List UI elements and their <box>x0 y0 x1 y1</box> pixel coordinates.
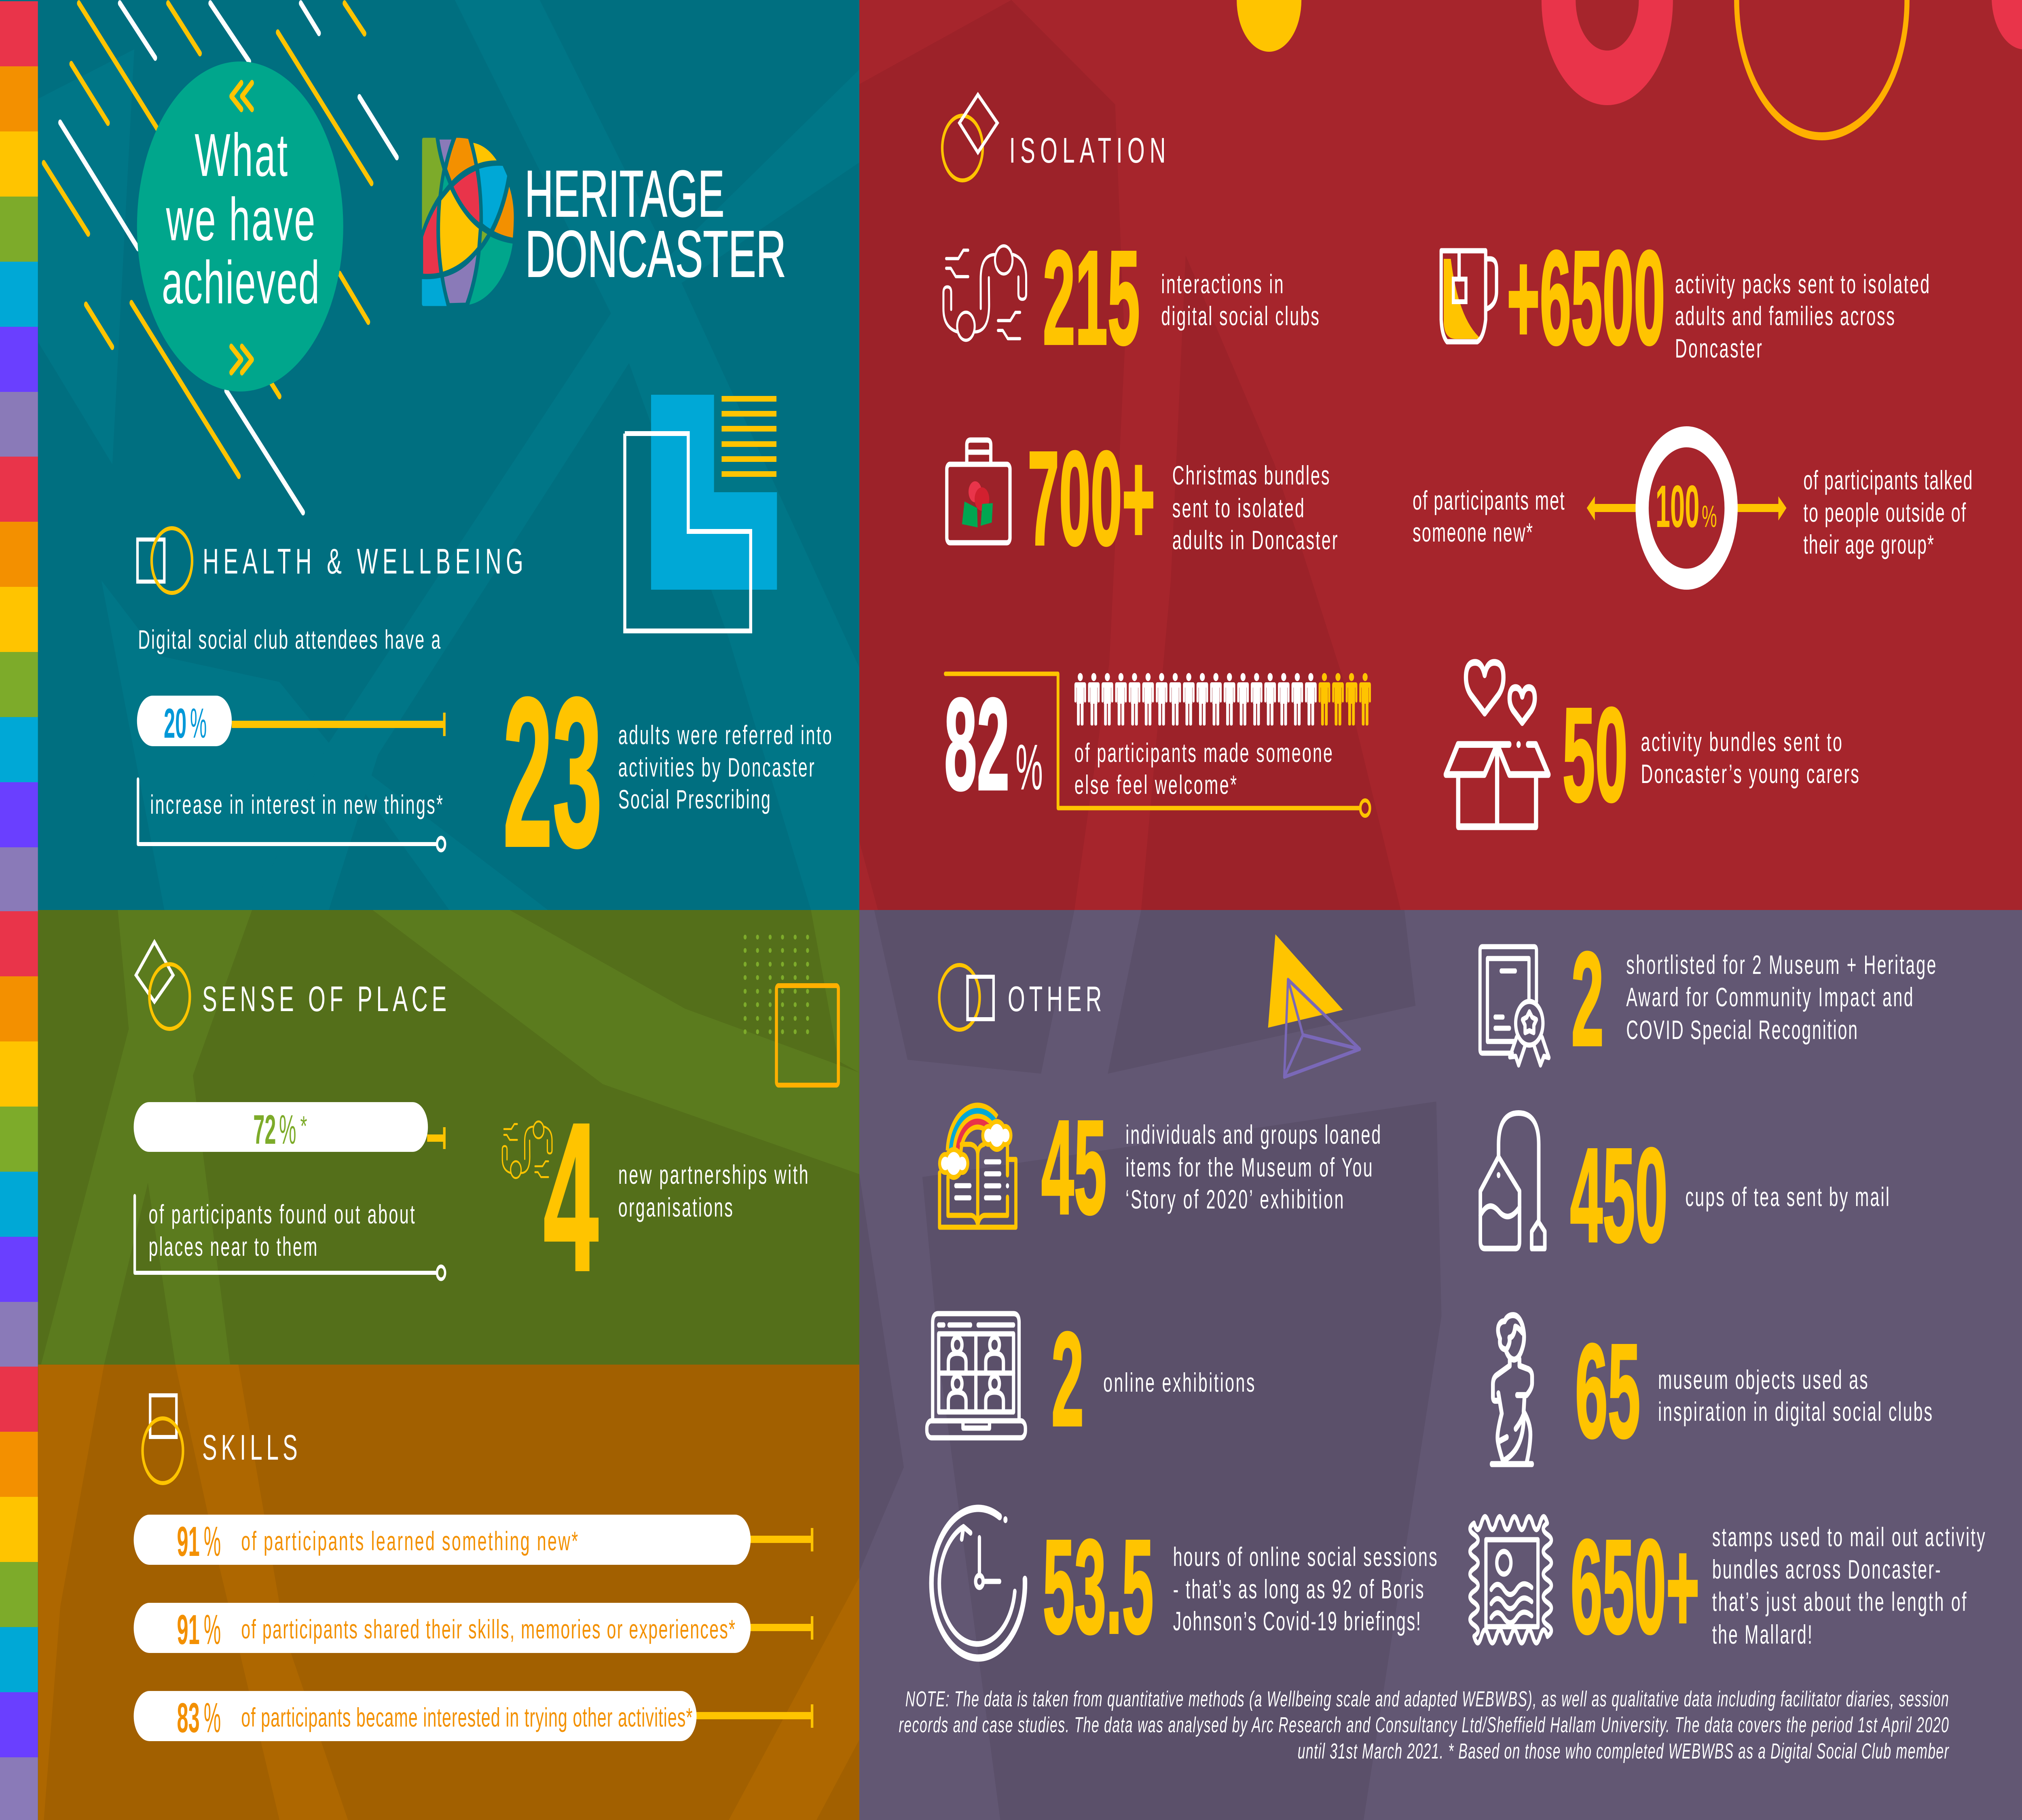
icon: stamp <box>1470 1517 1551 1643</box>
stat: 50 activity bundles: 50 <box>1563 681 1628 830</box>
stat: 4 partnerships: organisations <box>618 1192 733 1222</box>
stat: 45 loaned items <box>938 1093 1381 1242</box>
logo: Heritage Doncaster <box>422 138 786 306</box>
stat: 100 percent with arrows <box>1413 437 1973 579</box>
stat: 450 cups of tea: cups of tea sent by mail <box>1686 1182 1889 1212</box>
stat: 215 interactions: 215 <box>1043 224 1140 372</box>
title: we have <box>166 185 315 253</box>
stat: 6500 activity packs: adults and families across <box>1675 301 1895 331</box>
stat: 700 Christmas bundles <box>947 424 1338 573</box>
note text: until 31st March 2021. * Based on those who completed WEBWBS as a Digital Social Club member <box>1298 1739 1949 1763</box>
stat: 53.5 hours: hours of online social sessions <box>1173 1542 1437 1572</box>
stat: 700 Christmas bundles: Christmas bundles <box>1172 460 1330 490</box>
stat: 2 awards shortlisted: Award for Community Impact and <box>1626 982 1913 1012</box>
icon: clock <box>931 1508 1025 1658</box>
stat: 53.5 hours: - that’s as long as 92 of Boris <box>1173 1574 1424 1604</box>
icon: link people <box>943 246 1026 340</box>
stat: 82 percent with people <box>944 671 1371 818</box>
icon: opening chevrons <box>231 83 252 109</box>
stat: 20 percent bar: increase in interest in new things* <box>150 789 443 819</box>
note text: records and case studies. The data was analysed by Arc Research and Consultancy Ltd/Sheffield Hallam University. The data covers the period 1st April 2020 <box>899 1712 1949 1737</box>
arrow: right <box>1737 496 1787 521</box>
stat: 82 percent with people: else feel welcome* <box>1074 770 1237 800</box>
stat: skills bars: of participants learned something new* <box>241 1526 578 1556</box>
stat: 700 Christmas bundles: 700+ <box>1028 424 1155 573</box>
heading: skills: SKILLS <box>202 1428 298 1467</box>
stat: 65 museum objects: museum objects used as <box>1658 1365 1868 1395</box>
stat: 2 online exhibitions <box>927 1305 1254 1454</box>
icon: certificate <box>1480 947 1549 1065</box>
stat: 6500 activity packs: activity packs sent to isolated <box>1675 269 1929 299</box>
stat: 100 percent with arrows: to people outside of <box>1803 497 1966 527</box>
stat: 50 activity bundles: activity bundles sent to <box>1641 727 1842 757</box>
stat: skills bars: % <box>204 1606 221 1653</box>
stat: 650 stamps: bundles across Doncaster- <box>1712 1554 1941 1584</box>
arrow: left <box>1587 496 1636 521</box>
heading: health and wellbeing: HEALTH & WELLBEING <box>203 542 523 581</box>
icon: yellow handshake <box>502 1122 552 1178</box>
stat: 650 stamps: 650+ <box>1571 1513 1700 1661</box>
stat: 4 partnerships: new partnerships with <box>618 1160 808 1189</box>
icon: teabag <box>1481 1113 1545 1249</box>
logo wordmark: DONCASTER <box>525 217 786 291</box>
stat: 20 percent bar <box>137 696 446 851</box>
stat: 23 referrals <box>503 654 832 891</box>
stat: 65 museum objects: 65 <box>1575 1317 1640 1466</box>
stat: 50 activity bundles: Doncaster’s young carers <box>1641 759 1859 789</box>
stat: 2 awards shortlisted: COVID Special Recognition <box>1626 1015 1857 1045</box>
heading: isolation <box>942 95 1165 180</box>
stat: 450 cups of tea <box>1481 1113 1889 1270</box>
stat: 2 online exhibitions: 2 <box>1051 1305 1084 1454</box>
stat: 65 museum objects: inspiration in digital social clubs <box>1658 1397 1932 1426</box>
stat: skills bars: 91 <box>177 1606 200 1653</box>
icon: row of people <box>1074 673 1371 726</box>
icon: box with hearts <box>1446 662 1548 827</box>
stat: 82 percent with people: % <box>1015 731 1043 804</box>
stat: skills bars: of participants shared their skills, memories or experiences* <box>241 1614 735 1644</box>
title badge <box>137 61 343 392</box>
stat: 82 percent with people: 82 <box>944 671 1009 818</box>
decoration: dots and yellow rectangle <box>744 935 838 1085</box>
stat: 100 percent with arrows: 100 <box>1656 473 1700 540</box>
icon: stained glass D <box>422 138 514 306</box>
stat: 2 awards shortlisted <box>1480 925 1936 1074</box>
note text <box>899 1687 1949 1763</box>
note text: NOTE: The data is taken from quantitative methods (a Wellbeing scale and adapted WEBWBS), as well as qualitative data including facilitator diaries, session <box>905 1687 1949 1711</box>
stat: 650 stamps <box>1470 1513 1985 1661</box>
stat: 53.5 hours: Johnson’s Covid-19 briefings! <box>1173 1606 1421 1636</box>
stat: skills bars: 83 <box>177 1694 200 1742</box>
stat: 2 awards shortlisted: shortlisted for 2 Museum + Heritage <box>1626 950 1936 980</box>
heading: skills <box>142 1395 298 1483</box>
heading: other: OTHER <box>1008 979 1102 1019</box>
stat: 53.5 hours <box>931 1508 1437 1661</box>
stat: 72 percent bar: of participants found out about <box>149 1199 415 1229</box>
stat: 72 percent bar: * <box>300 1111 307 1142</box>
icon: laptop <box>927 1314 1026 1438</box>
heading: other <box>939 965 1102 1030</box>
stat: 700 Christmas bundles: sent to isolated <box>1172 493 1304 523</box>
stat: 72 percent bar: % <box>279 1107 296 1153</box>
stat: 82 percent with people: of participants made someone <box>1074 738 1332 768</box>
stat: 6500 activity packs: Doncaster <box>1675 333 1762 363</box>
icon: closing chevrons <box>231 347 252 372</box>
icon: gift bag <box>947 440 1010 543</box>
stat: 65 museum objects <box>1492 1315 1932 1466</box>
stat: 45 loaned items: ‘Story of 2020’ exhibition <box>1125 1184 1344 1214</box>
colour strip <box>0 1 38 1820</box>
stat: 45 loaned items: individuals and groups loaned <box>1125 1120 1381 1149</box>
stat: 20 percent bar: 20 <box>164 700 186 747</box>
icon: book with rainbow <box>938 1111 1016 1227</box>
icon: statue <box>1492 1315 1532 1464</box>
stat: 4 partnerships <box>502 1079 808 1315</box>
stat: 23 referrals: 23 <box>503 654 602 891</box>
stat: 45 loaned items: items for the Museum of You <box>1125 1152 1373 1182</box>
stat: skills bars <box>134 1515 813 1742</box>
title: achieved <box>162 248 319 316</box>
stat: 100 percent with arrows: of participants met <box>1413 485 1565 515</box>
stat: 215 interactions <box>943 224 1319 372</box>
stat: 53.5 hours: 53.5 <box>1043 1513 1153 1661</box>
stat: 2 online exhibitions: online exhibitions <box>1103 1367 1254 1397</box>
stat: skills bars: % <box>204 1694 221 1742</box>
heading: sense of place: SENSE OF PLACE <box>202 979 446 1019</box>
title <box>162 121 319 316</box>
stat: 100 percent with arrows: of participants talked <box>1803 465 1973 495</box>
stat: 23 referrals: activities by Doncaster <box>618 752 814 782</box>
heading: sense of place <box>136 942 446 1029</box>
stat: 100 percent with arrows: % <box>1702 500 1717 534</box>
stat: 650 stamps: that’s just about the length of <box>1712 1587 1967 1617</box>
icon: mug <box>1441 251 1497 342</box>
heading: isolation: ISOLATION <box>1009 131 1165 170</box>
stat: 215 interactions: digital social clubs <box>1161 301 1319 331</box>
stat: 45 loaned items: 45 <box>1041 1093 1106 1242</box>
stat: 72 percent bar: places near to them <box>149 1232 317 1261</box>
stat: 650 stamps: the Mallard! <box>1712 1619 1812 1649</box>
stat: 6500 activity packs: +6500 <box>1507 224 1665 372</box>
stat: 2 awards shortlisted: 2 <box>1571 925 1604 1074</box>
stat: 72 percent bar: 72 <box>253 1107 276 1153</box>
stat: 700 Christmas bundles: adults in Doncaster <box>1172 525 1338 555</box>
decoration: blue L shape <box>625 395 777 631</box>
stat: 72 percent bar <box>134 1102 446 1279</box>
logo wordmark <box>525 157 786 291</box>
stat: 100 percent with arrows: someone new* <box>1413 517 1533 547</box>
decoration: top circles <box>1237 0 2022 136</box>
stat: skills bars: of participants became interested in trying other activities* <box>241 1702 693 1732</box>
stat: 450 cups of tea: 450 <box>1570 1121 1668 1270</box>
text: digital social club intro: Digital social club attendees have a <box>138 624 441 654</box>
decoration: triangle and prism <box>1268 934 1360 1077</box>
stat: skills bars: 91 <box>177 1518 200 1565</box>
stat: skills bars: % <box>204 1518 221 1565</box>
stat: 650 stamps: stamps used to mail out activity <box>1712 1522 1985 1552</box>
stat: 50 activity bundles <box>1446 662 1859 830</box>
stat: 6500 activity packs <box>1441 224 1929 372</box>
stat: 4 partnerships: 4 <box>544 1079 599 1315</box>
diagonal lines decoration <box>44 3 397 512</box>
logo wordmark: HERITAGE <box>525 157 724 231</box>
stat: 100 percent with arrows: their age group* <box>1803 529 1934 559</box>
stat: 20 percent bar: % <box>190 700 207 747</box>
stat: 23 referrals: Social Prescribing <box>618 784 770 814</box>
heading: health and wellbeing <box>137 528 523 593</box>
title: What <box>195 121 288 189</box>
stat: 23 referrals: adults were referred into <box>618 720 832 750</box>
stat: 215 interactions: interactions in <box>1161 269 1284 299</box>
